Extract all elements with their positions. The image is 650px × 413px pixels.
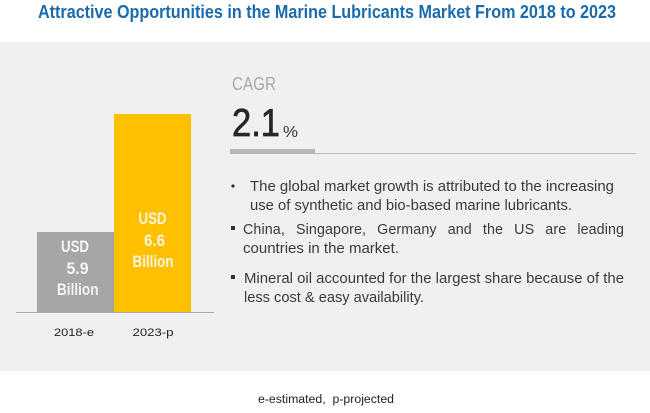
bullet 2 xyxy=(231,222,624,257)
bar: 2018 estimated: Billion xyxy=(57,281,98,299)
bullet 3: less cost & easy availability. xyxy=(244,290,424,306)
bullet 2: countries in the market. xyxy=(243,241,399,257)
bar: 2018 estimated xyxy=(37,232,114,312)
bullet list xyxy=(231,179,624,306)
bar: 2023 projected: USD xyxy=(138,210,167,228)
CAGR block xyxy=(230,74,636,154)
label: 2023-p: 2023-p xyxy=(132,327,174,339)
bullet 3 xyxy=(231,271,624,306)
CAGR percent sign: % xyxy=(283,124,298,141)
CAGR value: 2.1 xyxy=(232,102,280,145)
bar chart xyxy=(16,114,214,339)
CAGR thick rule xyxy=(230,149,315,154)
bullet 3: Mineral oil accounted for the largest share because of the xyxy=(244,271,624,287)
CAGR thin rule xyxy=(315,153,636,154)
bar: 2018 estimated: 5.9 xyxy=(66,260,88,278)
CAGR label: CAGR xyxy=(232,74,276,94)
bar: 2023 projected: Billion xyxy=(132,253,174,271)
panel: background xyxy=(0,42,650,371)
bar: 2018 estimated: USD xyxy=(61,238,89,256)
footnote: e-estimated, p-projected xyxy=(258,394,394,406)
bar: 2023 projected: 6.6 xyxy=(144,232,165,250)
bullet 2: China, Singapore, Germany and the US are leading xyxy=(243,222,624,238)
axis line xyxy=(16,312,214,313)
bar: 2023 projected xyxy=(114,114,191,312)
bullet 1: The global market growth is attributed to the increasing xyxy=(250,179,614,195)
bullet 1: use of synthetic and bio-based marine lubricants. xyxy=(250,198,572,214)
label: 2018-e: 2018-e xyxy=(54,327,94,339)
bullet 1 xyxy=(231,179,614,214)
